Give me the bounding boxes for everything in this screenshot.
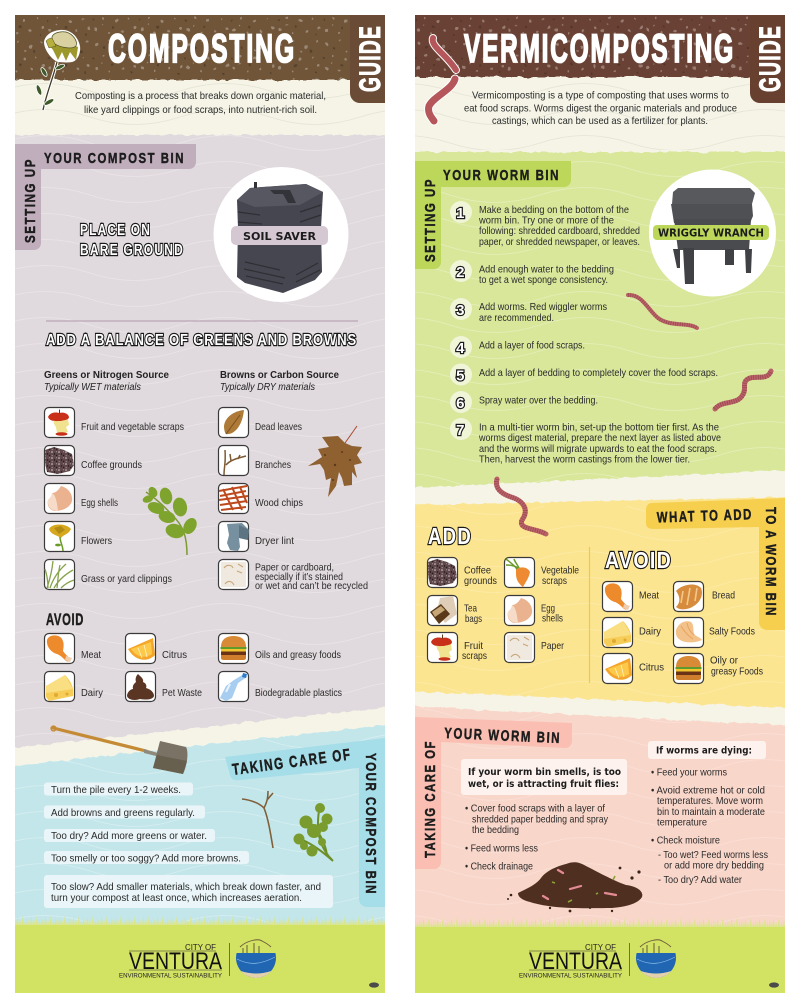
list: worms dying actions: or add more dry bedding (664, 860, 764, 872)
intro text: composting: like yard clippings or food scraps, into nutrient-rich soil. (84, 105, 317, 116)
item: paper or cardboard: especially if it’s stained (255, 572, 343, 583)
tip: too smelly: Too smelly or too soggy? Add more browns. (51, 854, 241, 864)
item: paper or cardboard (218, 560, 368, 592)
heading: what to add to a worm bin (646, 498, 785, 630)
step 1: paper, or shredded newspaper, or leaves. (479, 237, 640, 248)
step 3: Add worms. Red wiggler worms (479, 302, 607, 313)
heading: taking care of your worm bin (415, 717, 572, 869)
heading: what to add to a worm bin: TO A WORM BIN (762, 507, 779, 617)
item: salty foods (674, 618, 755, 648)
step 7 (450, 418, 721, 466)
item: fruit scraps (428, 632, 487, 662)
item: dairy: Dairy (639, 626, 662, 638)
heading: add a balance of greens and browns: ADD A BALANCE OF GREENS AND BROWNS (46, 332, 357, 349)
text: place on bare ground (80, 222, 184, 259)
callout: bin smells (461, 759, 627, 795)
step 2 (450, 260, 614, 286)
intro text: composting: Composting is a process that breaks down organic material, (75, 91, 326, 102)
callout: worms dying: If worms are dying: (656, 746, 752, 756)
item: oils and greasy foods: Oils and greasy foods (255, 650, 341, 661)
list: worms dying actions (651, 768, 768, 886)
step 3 (450, 298, 607, 324)
item: dryer lint (218, 522, 294, 552)
item: dead leaves: Dead leaves (255, 422, 302, 433)
heading: setting up your compost bin: SETTING UP (22, 158, 39, 243)
illustration: twig (242, 791, 273, 848)
item: vegetable scraps: Vegetable (541, 566, 579, 576)
item: oily or greasy foods: Oily or (710, 656, 739, 666)
item: dairy: Dairy (81, 688, 104, 699)
heading: taking care of your compost bin (225, 738, 385, 907)
item: oily or greasy foods (674, 654, 763, 684)
item: flowers (44, 522, 112, 552)
illustration: soil saver compost bin (214, 167, 348, 302)
logo: city of ventura: ENVIRONMENTAL SUSTAINABILITY (119, 972, 223, 980)
logo: city of ventura (519, 940, 779, 988)
item: egg shells: Egg (541, 604, 555, 614)
step 1: worm bin. Try one or more of the (478, 216, 614, 226)
item: meat (44, 634, 101, 664)
step 2: to get a wet sponge consistency. (479, 275, 608, 286)
item: coffee grounds (44, 446, 142, 476)
step 1: following: shredded cardboard, shredded (479, 226, 640, 237)
tip: too slow: turn your compost at least once, which increases aeration. (51, 893, 302, 904)
column heading: browns: Typically DRY materials (220, 382, 315, 393)
list: bin smells actions (465, 804, 609, 872)
list: worms dying actions: temperatures. Move worm (657, 796, 763, 807)
list: bin smells actions: shredded paper bedding and spray (472, 814, 609, 826)
column heading: browns (220, 370, 339, 393)
item: grass or yard clippings: Grass or yard clippings (81, 574, 172, 585)
heading: taking care of your compost bin: YOUR COMPOST BIN (362, 753, 379, 895)
list: bin smells actions: • Check drainage (465, 862, 533, 872)
heading: setting up your worm bin: SETTING UP (422, 178, 439, 262)
step 1: Make a bedding on the bottom of the (479, 205, 629, 216)
illustration: worm 3 (496, 479, 546, 534)
item: biodegradable plastics: Biodegradable plastics (255, 688, 342, 699)
item: branches: Branches (255, 460, 291, 471)
illustration: worm 2 (715, 371, 771, 409)
item: paper: Paper (541, 641, 564, 652)
item: vegetable scraps (504, 558, 579, 588)
intro text: composting (75, 91, 326, 116)
heading: taking care of your worm bin: TAKING CARE OF (422, 740, 439, 858)
tip: add browns and greens: Add browns and greens regularly. (51, 808, 195, 819)
item: grass or yard clippings (44, 560, 172, 590)
item: tea bags (428, 596, 482, 626)
item: paper (504, 632, 564, 662)
callout: worms dying (648, 741, 766, 759)
text: place on bare ground: BARE GROUND (80, 242, 184, 259)
panel: vermicomposting guide (405, 5, 795, 995)
item: egg shells: Egg shells (81, 498, 118, 509)
heading: taking care of your compost bin: TAKING CARE OF (231, 746, 352, 779)
list: bin smells actions: the bedding (472, 825, 519, 836)
step 7: worms digest material, prepare the next layer as listed above (478, 433, 721, 444)
heading: add: ADD (428, 523, 472, 549)
step 5: Add a layer of bedding to completely cover the food scraps. (479, 368, 718, 379)
intro text: vermicomposting: castings, which can be used as a fertilizer for plants. (492, 116, 708, 127)
item: coffee grounds (428, 558, 497, 588)
step 4: 4 (456, 340, 466, 357)
step 1 (450, 201, 640, 248)
tip: too slow (44, 875, 333, 908)
item: dairy (44, 672, 104, 702)
step 7: In a multi-tier worm bin, set-up the bottom tier first. As the (479, 422, 719, 434)
item: citrus (126, 634, 187, 664)
step 2: 2 (456, 264, 466, 281)
item: fruit and vegetable scraps (44, 408, 184, 438)
list: worms dying actions: • Feed your worms (651, 768, 727, 778)
logo: city of ventura: CITY OF (585, 943, 616, 952)
item: biodegradable plastics (218, 672, 342, 702)
item: paper or cardboard: Paper or cardboard, (255, 562, 334, 574)
column heading: greens: Greens or Nitrogen Source (44, 370, 169, 381)
list: bin smells actions: • Feed worms less (465, 844, 538, 854)
column heading: greens (44, 370, 169, 393)
step 1: 1 (456, 205, 466, 222)
item: egg shells (504, 596, 563, 626)
list: bin smells actions: • Cover food scraps with a layer of (465, 804, 605, 814)
item: salty foods: Salty Foods (709, 626, 755, 638)
item: pet waste: Pet Waste (162, 688, 202, 699)
item: dryer lint: Dryer lint (255, 536, 294, 547)
item: dairy (602, 618, 662, 648)
heading: taking care of your worm bin: YOUR WORM BIN (444, 725, 561, 747)
intro text: vermicomposting (464, 90, 737, 127)
text: place on bare ground: PLACE ON (80, 222, 151, 239)
illustration: herb sprig (294, 803, 333, 861)
title: composting: COMPOSTING (108, 27, 296, 71)
step 6: 6 (456, 395, 466, 412)
item: citrus: Citrus (639, 662, 664, 674)
callout: bin smells: wet, or is attracting fruit flies: (468, 779, 619, 790)
intro text: vermicomposting: Vermicomposting is a type of composting that uses worms to (472, 90, 729, 102)
item: vegetable scraps: scraps (542, 576, 567, 587)
illustration: wriggly wranch worm bin: WRIGGLY WRANCH (658, 228, 764, 240)
list: worms dying actions: - Too wet? Feed worms less (658, 850, 768, 861)
heading: setting up your worm bin (415, 161, 571, 269)
list: worms dying actions: temperature (657, 818, 707, 828)
item: egg shells: shells (542, 614, 563, 624)
heading: what to add to a worm bin: WHAT TO ADD (657, 506, 753, 526)
item: coffee grounds: Coffee grounds (81, 460, 142, 471)
list: worms dying actions: • Avoid extreme hot or cold (651, 786, 765, 796)
step 6 (450, 391, 598, 413)
item: meat: Meat (81, 650, 101, 661)
item: egg shells (44, 484, 118, 514)
step 3: are recommended. (479, 313, 554, 324)
heading: setting up your worm bin: YOUR WORM BIN (443, 167, 560, 184)
step 6: Spray water over the bedding. (479, 396, 598, 406)
step 7: Then, harvest the worm castings from the lower tier. (479, 454, 690, 466)
illustration: soil saver compost bin: SOIL SAVER (243, 230, 317, 243)
item: dead leaves (218, 408, 302, 438)
step 2: Add enough water to the bedding (479, 264, 614, 276)
item: wood chips (218, 484, 303, 514)
tip: too slow: Too slow? Add smaller materials, which break down faster, and (51, 882, 321, 893)
item: fruit scraps: Fruit (464, 641, 483, 652)
heading: avoid: AVOID (605, 547, 672, 573)
tip: too dry: Too dry? Add more greens or water. (51, 831, 207, 842)
column heading: browns: Browns or Carbon Source (220, 370, 339, 381)
item: meat (602, 582, 659, 612)
logo: city of ventura: VENTURA (529, 948, 623, 975)
heading: avoid: AVOID (46, 610, 84, 629)
step 7: 7 (456, 422, 466, 439)
step 7: and the worms will migrate upwards to eat the food scraps. (479, 444, 717, 455)
item: coffee grounds: grounds (464, 576, 497, 587)
illustration: compost pile with worms (507, 862, 642, 912)
illustration: worm in header (429, 38, 456, 121)
illustration: brown maple leaf (308, 426, 362, 497)
item: tea bags: Tea (464, 604, 477, 614)
tab: guide (350, 15, 387, 103)
tab: guide (750, 15, 787, 103)
heading: setting up your compost bin: YOUR COMPOST BIN (44, 150, 185, 167)
list: worms dying actions: bin to maintain a moderate (657, 807, 765, 818)
item: coffee grounds: Coffee (464, 566, 491, 576)
panel: composting guide (5, 5, 395, 995)
step 3: 3 (456, 302, 466, 319)
column heading: greens: Typically WET materials (44, 382, 141, 393)
item: branches (218, 446, 291, 476)
item: citrus (602, 654, 664, 684)
illustration: wriggly wranch worm bin (649, 170, 776, 296)
item: oily or greasy foods: greasy Foods (711, 666, 763, 678)
illustration: shovel (51, 726, 187, 774)
item: bread: Bread (712, 590, 735, 602)
logo: city of ventura: VENTURA (129, 948, 223, 975)
step 4: Add a layer of food scraps. (479, 340, 585, 352)
item: citrus: Citrus (162, 650, 187, 661)
item: pet waste (126, 672, 202, 702)
logo: city of ventura: CITY OF (185, 943, 216, 952)
icon: daisy flower (35, 30, 80, 110)
item: fruit scraps: scraps (462, 651, 487, 662)
intro text: vermicomposting: eat food scraps. Worms digest the organic materials and produce (464, 104, 737, 114)
logo: city of ventura: ENVIRONMENTAL SUSTAINABILITY (519, 972, 623, 980)
item: meat: Meat (639, 590, 659, 602)
step 5: 5 (456, 368, 466, 384)
illustration: green sprig (142, 485, 199, 555)
item: fruit and vegetable scraps: Fruit and vegetable scraps (81, 422, 184, 433)
step 4 (450, 336, 585, 358)
illustration: worm 1 (628, 295, 697, 328)
item: bread (674, 582, 735, 612)
list: worms dying actions: - Too dry? Add water (658, 875, 742, 886)
list: worms dying actions: • Check moisture (651, 836, 720, 846)
logo: city of ventura (119, 940, 379, 988)
item: wood chips: Wood chips (255, 498, 303, 509)
step 5 (450, 364, 718, 386)
tip: turn the pile: Turn the pile every 1-2 weeks. (51, 785, 181, 796)
callout: bin smells: If your worm bin smells, is too (468, 767, 621, 778)
item: tea bags: bags (465, 614, 482, 625)
item: paper or cardboard: or wet and can’t be recycled (255, 581, 368, 592)
heading: setting up your compost bin (15, 144, 196, 250)
item: oils and greasy foods (218, 634, 341, 664)
item: flowers: Flowers (81, 536, 112, 547)
